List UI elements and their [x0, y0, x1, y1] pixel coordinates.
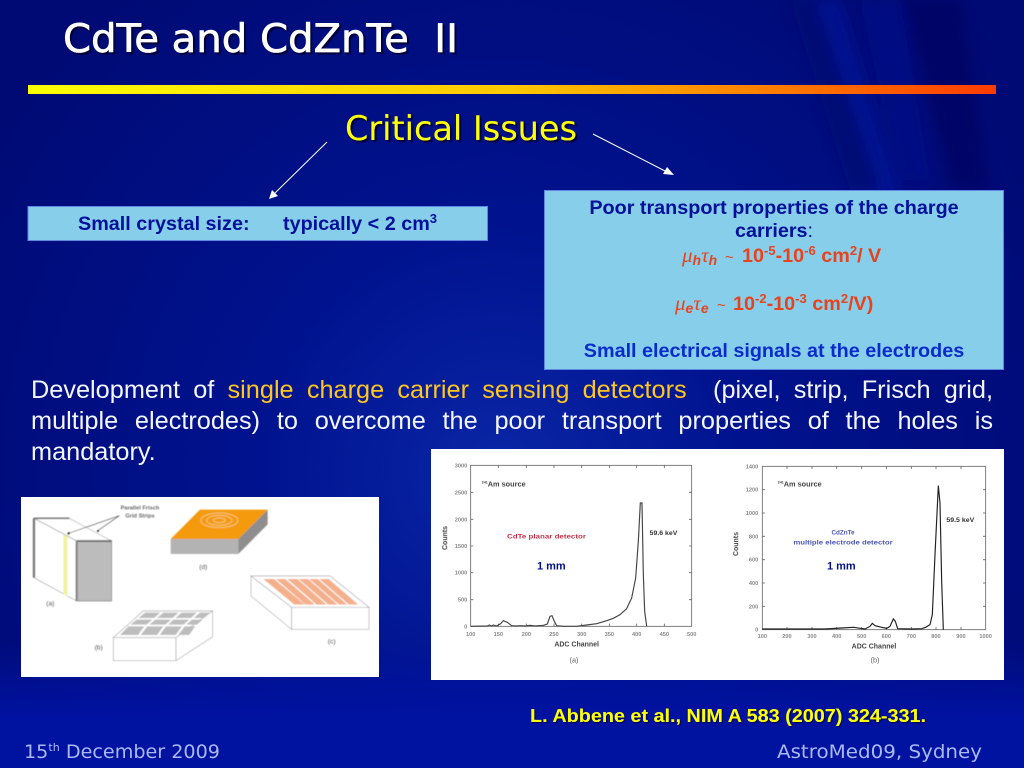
chart: CdZnTe multiple electrode detector spectrum: CdZnTe [831, 530, 855, 537]
electron mobility-lifetime formula: -3 [795, 291, 807, 306]
chart: CdTe planar detector spectrum: 400 [632, 632, 641, 638]
electron mobility-lifetime formula: -10 [767, 293, 795, 315]
icon: ring electrode detector (d) [171, 510, 268, 571]
chart: CdTe planar detector spectrum: 150 [494, 632, 503, 638]
footer: date: th [48, 741, 60, 754]
footer: date: December 2009 [60, 741, 220, 763]
transport heading: Poor transport properties of the charge [589, 197, 959, 219]
electron mobility-lifetime formula: 2 [841, 291, 848, 306]
chart: CdZnTe multiple electrode detector spectrum: 400 [832, 634, 841, 640]
chart: CdZnTe multiple electrode detector spectrum: ADC Channel [852, 644, 896, 651]
chart: CdTe planar detector spectrum: Am source [488, 479, 526, 488]
arrow: to crystal size box [269, 142, 327, 199]
icon: Frisch grid detector (a): Grid Strips [125, 514, 155, 520]
figure: detector electrode geometries [21, 497, 379, 677]
electron mobility-lifetime formula: e [701, 300, 709, 316]
chart: CdTe planar detector spectrum: 0 [464, 624, 467, 630]
chart: CdZnTe multiple electrode detector spectrum: 200 [782, 634, 792, 640]
body paragraph: Development of single charge carrier sensing detectors (pixel, strip, Frisch grid, [31, 376, 993, 404]
panel: poor transport properties [544, 190, 1004, 370]
hole mobility-lifetime formula: -10 [776, 245, 804, 267]
chart: CdZnTe multiple electrode detector spectrum: 241 [778, 481, 784, 485]
electron mobility-lifetime formula: ~ [717, 297, 726, 314]
chart: CdTe planar detector spectrum: 200 [522, 632, 531, 638]
chart: CdZnTe multiple electrode detector spectrum: 100 [758, 634, 767, 640]
transport heading second line: carriers: [735, 220, 813, 242]
hole mobility-lifetime formula: τ [701, 243, 710, 267]
chart: CdZnTe multiple electrode detector spectrum: 900 [956, 634, 966, 640]
electron mobility-lifetime formula: /V) [848, 293, 873, 315]
figure: spectra white panel [431, 449, 1004, 680]
chart: CdTe planar detector spectrum: (a) [570, 656, 578, 665]
small signals note: Small electrical signals at the electrodes [584, 340, 964, 362]
hole mobility-lifetime formula: μ [681, 243, 693, 267]
hole mobility-lifetime formula: -5 [764, 243, 776, 258]
icon: Frisch grid detector (a): (a) [46, 601, 54, 608]
chart: CdZnTe multiple electrode detector spectrum: 600 [882, 634, 891, 640]
chart: CdZnTe multiple electrode detector spectrum: 59.5 keV [946, 518, 974, 524]
icon: Frisch grid detector (a) [34, 506, 160, 608]
hole mobility-lifetime formula: cm [816, 245, 850, 267]
hole mobility-lifetime formula: h [709, 252, 717, 268]
icon: Frisch grid detector (a): Parallel Frisch [121, 506, 160, 512]
icon: strip detector (c) [251, 576, 369, 646]
chart: CdTe planar detector spectrum: 2000 [455, 517, 467, 523]
icon: strip detector (c): (c) [328, 639, 336, 646]
icon: pixel detector (b): (b) [95, 645, 103, 652]
chart: CdZnTe multiple electrode detector spectrum: 0 [755, 628, 758, 634]
chart: CdZnTe multiple electrode detector spectrum: Counts [733, 532, 740, 556]
chart: CdZnTe multiple electrode detector spectrum: 300 [807, 634, 817, 640]
chart: CdTe planar detector spectrum: 350 [605, 632, 614, 638]
chart: CdZnTe multiple electrode detector spectrum [733, 464, 992, 665]
body paragraph: mandatory. [31, 438, 156, 466]
arrow: to transport box [593, 134, 674, 175]
chart: CdZnTe multiple electrode detector spectrum: 600 [749, 558, 758, 564]
subheading: critical issues: Critical Issues [345, 109, 577, 149]
chart: CdZnTe multiple electrode detector spectrum: multiple electrode detector [793, 540, 893, 547]
chart: CdZnTe multiple electrode detector spectrum: 1000 [746, 511, 758, 517]
hole mobility-lifetime formula: h [693, 252, 701, 268]
chart: CdTe planar detector spectrum: 300 [577, 632, 586, 638]
chart: CdZnTe multiple electrode detector spectrum: 800 [931, 634, 941, 640]
gradient divider bar [28, 85, 996, 94]
title: CdTe and CdZnTe II [63, 17, 458, 62]
chart: CdZnTe multiple electrode detector spectrum: 1400 [746, 464, 758, 470]
chart: CdTe planar detector spectrum: 3000 [455, 463, 467, 469]
chart: CdTe planar detector spectrum: 241 [482, 480, 488, 484]
chart: CdTe planar detector spectrum: 2500 [455, 490, 467, 496]
electron mobility-lifetime formula: τ [693, 291, 702, 315]
body paragraph [31, 376, 993, 466]
chart: CdTe planar detector spectrum: 1500 [455, 544, 467, 550]
footer: venue: AstroMed09, Sydney [777, 741, 982, 763]
electron mobility-lifetime formula: 10 [733, 293, 755, 315]
chart: CdZnTe multiple electrode detector spectrum: 1200 [746, 488, 758, 494]
citation: L. Abbene et al., NIM A 583 (2007) 324-331. [530, 706, 926, 726]
chart: CdZnTe multiple electrode detector spectrum: 400 [749, 581, 758, 587]
footer: date: 15 [24, 741, 48, 763]
chart: CdZnTe multiple electrode detector spectrum: 700 [907, 634, 916, 640]
body paragraph: multiple electrodes) to overcome the poor transport properties of the holes is [31, 407, 993, 435]
crystal size text: typically < 2 cm [283, 213, 430, 235]
hole mobility-lifetime formula: ~ [725, 249, 734, 266]
chart: CdTe planar detector spectrum: 450 [660, 632, 669, 638]
chart: CdTe planar detector spectrum: 1000 [455, 571, 467, 577]
chart: CdTe planar detector spectrum: 500 [687, 632, 696, 638]
thickness label: 1 mm [827, 560, 856, 572]
hole mobility-lifetime formula: 2 [850, 243, 857, 258]
chart: CdTe planar detector spectrum: 100 [466, 632, 475, 638]
panel: small crystal size [28, 206, 488, 240]
chart: CdTe planar detector spectrum: ADC Channel [554, 642, 599, 649]
chart: CdZnTe multiple electrode detector spectrum: 200 [749, 604, 758, 610]
chart: CdZnTe multiple electrode detector spectrum: 1000 [979, 634, 992, 640]
chart: CdTe planar detector spectrum [442, 463, 696, 665]
icon: ring electrode detector (d): (d) [199, 564, 207, 571]
hole mobility-lifetime formula: -6 [804, 243, 816, 258]
electron mobility-lifetime formula: -2 [755, 291, 767, 306]
chart: CdTe planar detector spectrum: 59.6 keV [650, 531, 677, 537]
chart: CdTe planar detector spectrum: 250 [549, 632, 559, 638]
crystal size text: 3 [430, 211, 437, 226]
electron mobility-lifetime formula: e [686, 300, 694, 316]
icon: pixel detector (b) [95, 611, 213, 661]
hole mobility-lifetime formula: 10 [742, 245, 764, 267]
hole mobility-lifetime formula: / V [857, 245, 882, 267]
electron mobility-lifetime formula: cm [807, 293, 841, 315]
thickness label: 1 mm [537, 560, 566, 572]
chart: CdZnTe multiple electrode detector spectrum: Am source [784, 480, 822, 489]
chart: CdZnTe multiple electrode detector spectrum: (b) [871, 656, 879, 665]
chart: CdTe planar detector spectrum: CdTe planar detector [507, 534, 586, 541]
crystal size text: Small crystal size: [78, 213, 250, 235]
electron mobility-lifetime formula: μ [674, 291, 686, 315]
chart: CdTe planar detector spectrum: 500 [458, 598, 467, 604]
chart: CdZnTe multiple electrode detector spectrum: 500 [857, 634, 866, 640]
chart: CdTe planar detector spectrum: Counts [442, 526, 449, 550]
chart: CdZnTe multiple electrode detector spectrum: 800 [749, 534, 758, 540]
